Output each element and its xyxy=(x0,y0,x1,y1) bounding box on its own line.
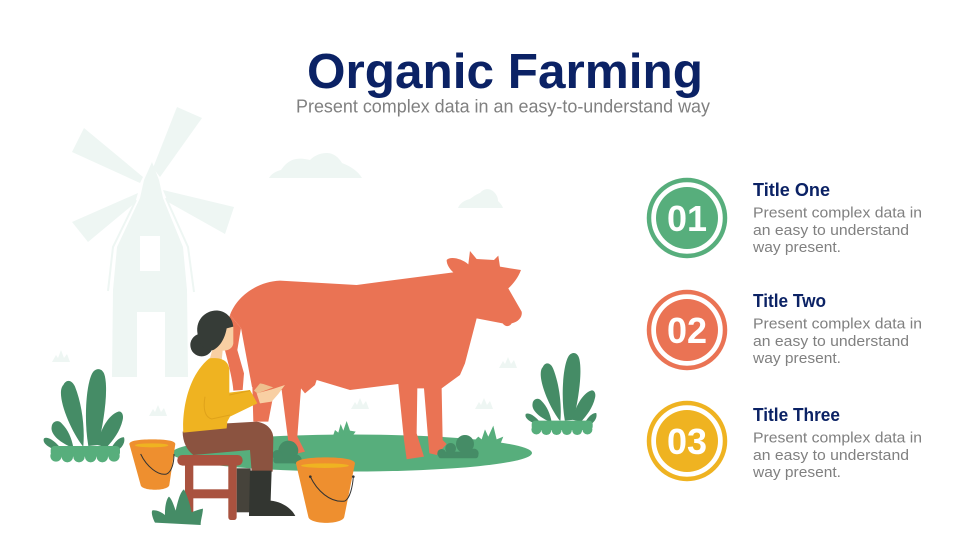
pale grass tufts xyxy=(52,350,517,416)
title: Organic Farming xyxy=(307,45,703,99)
cloud small xyxy=(458,189,503,208)
cloud large xyxy=(269,153,362,178)
item two text: Present complex data in xyxy=(753,316,922,332)
left plant xyxy=(44,369,124,462)
hair xyxy=(190,311,233,356)
badge 01 xyxy=(649,180,725,256)
windmill background xyxy=(72,107,234,377)
grass tuft rear xyxy=(333,421,356,436)
item three heading: Title Three xyxy=(753,405,840,425)
small bucket xyxy=(129,439,175,490)
near boot xyxy=(249,471,295,516)
item one heading: Title One xyxy=(753,180,830,200)
item three text: Present complex data in xyxy=(753,430,922,446)
foreground grass and bush on ground xyxy=(333,421,503,458)
badge 03 xyxy=(649,403,725,479)
item one text: Present complex data in xyxy=(753,204,922,222)
item one text: an easy to understand xyxy=(753,222,909,239)
back hand xyxy=(254,383,273,393)
item two heading: Title Two xyxy=(753,291,826,311)
item two text xyxy=(752,316,922,367)
badge 02: 02 xyxy=(667,310,707,351)
trousers xyxy=(183,422,273,472)
bush behind person xyxy=(272,441,302,464)
cow xyxy=(224,251,522,459)
badge 02 xyxy=(649,292,725,368)
badge 01: 01 xyxy=(667,198,707,239)
far boot xyxy=(237,468,251,512)
item two text: an easy to understand xyxy=(753,333,909,350)
grass tuft front xyxy=(475,426,503,445)
cow body xyxy=(230,251,522,459)
person and props xyxy=(129,311,355,525)
item three text: an easy to understand xyxy=(753,447,909,464)
subtitle: Present complex data in an easy-to-understand way xyxy=(296,96,710,116)
item two xyxy=(649,291,922,368)
item three xyxy=(649,403,922,481)
item two text: way present. xyxy=(752,350,841,367)
front hand xyxy=(257,385,285,403)
item three text xyxy=(752,430,922,481)
item one xyxy=(649,180,922,256)
front grass xyxy=(152,489,203,525)
item one text: way present. xyxy=(752,239,841,256)
stool xyxy=(177,455,243,520)
ground ellipse xyxy=(172,434,532,472)
neck and face xyxy=(209,326,233,361)
cow tail and far hind leg xyxy=(224,315,275,422)
bush front of hoof xyxy=(437,435,479,458)
item one text xyxy=(752,204,922,256)
shirt xyxy=(183,358,257,433)
large bucket xyxy=(296,457,355,523)
badge 03: 03 xyxy=(667,421,707,462)
item three text: way present. xyxy=(752,464,841,481)
right plant xyxy=(525,353,597,435)
